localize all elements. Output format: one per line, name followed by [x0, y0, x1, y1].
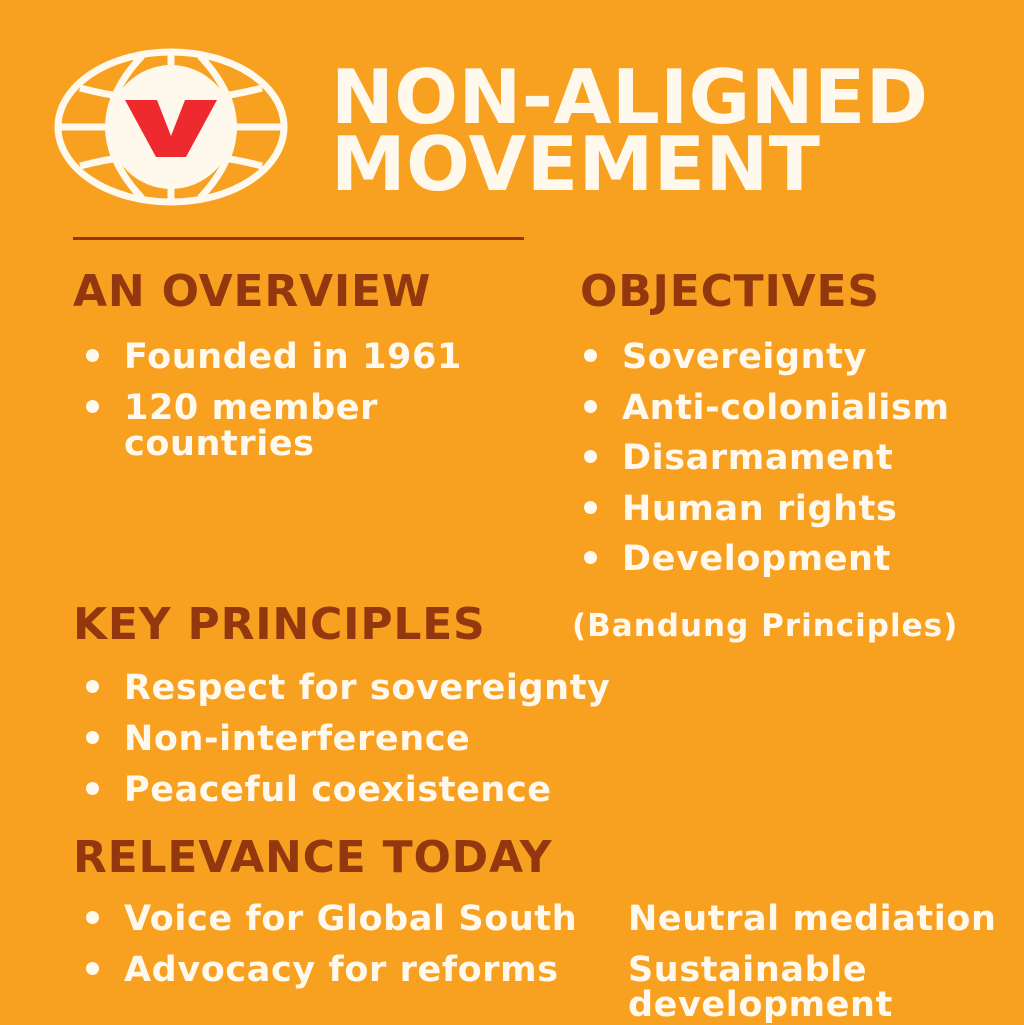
list: relevance: Advocacy for reforms — [124, 950, 559, 990]
list: principles — [86, 668, 610, 810]
icon: globe logo — [54, 48, 288, 206]
list: relevance: Voice for Global South — [124, 899, 577, 939]
list: objectives: Development — [622, 539, 891, 579]
list: relevance: Sustainable — [628, 950, 867, 990]
list: objectives: Anti-colonialism — [622, 388, 950, 428]
list: overview: countries — [124, 424, 315, 464]
list: overview — [86, 337, 462, 464]
heading: overview: AN OVERVIEW — [73, 266, 431, 317]
list: principles: Respect for sovereignty — [124, 668, 610, 708]
list: overview: 120 member — [124, 388, 378, 428]
list: objectives — [584, 337, 950, 579]
heading: objectives: OBJECTIVES — [580, 266, 880, 317]
list: relevance: development — [628, 985, 893, 1025]
heading: relevance today: RELEVANCE TODAY — [73, 832, 552, 883]
list: objectives: Disarmament — [622, 438, 893, 478]
divider — [73, 237, 524, 240]
list: principles: Non-interference — [124, 719, 470, 759]
list: relevance: Neutral mediation — [628, 899, 997, 939]
list: principles: Peaceful coexistence — [124, 770, 552, 810]
heading: key principles: KEY PRINCIPLES — [73, 599, 486, 650]
list: overview: Founded in 1961 — [124, 337, 462, 377]
list: relevance — [86, 899, 997, 1025]
title: NON-ALIGNED — [331, 53, 928, 141]
list: objectives: Sovereignty — [622, 337, 867, 377]
title: MOVEMENT — [331, 120, 820, 208]
title — [331, 53, 928, 208]
list: objectives: Human rights — [622, 489, 897, 529]
note: Bandung Principles: (Bandung Principles) — [572, 608, 958, 644]
